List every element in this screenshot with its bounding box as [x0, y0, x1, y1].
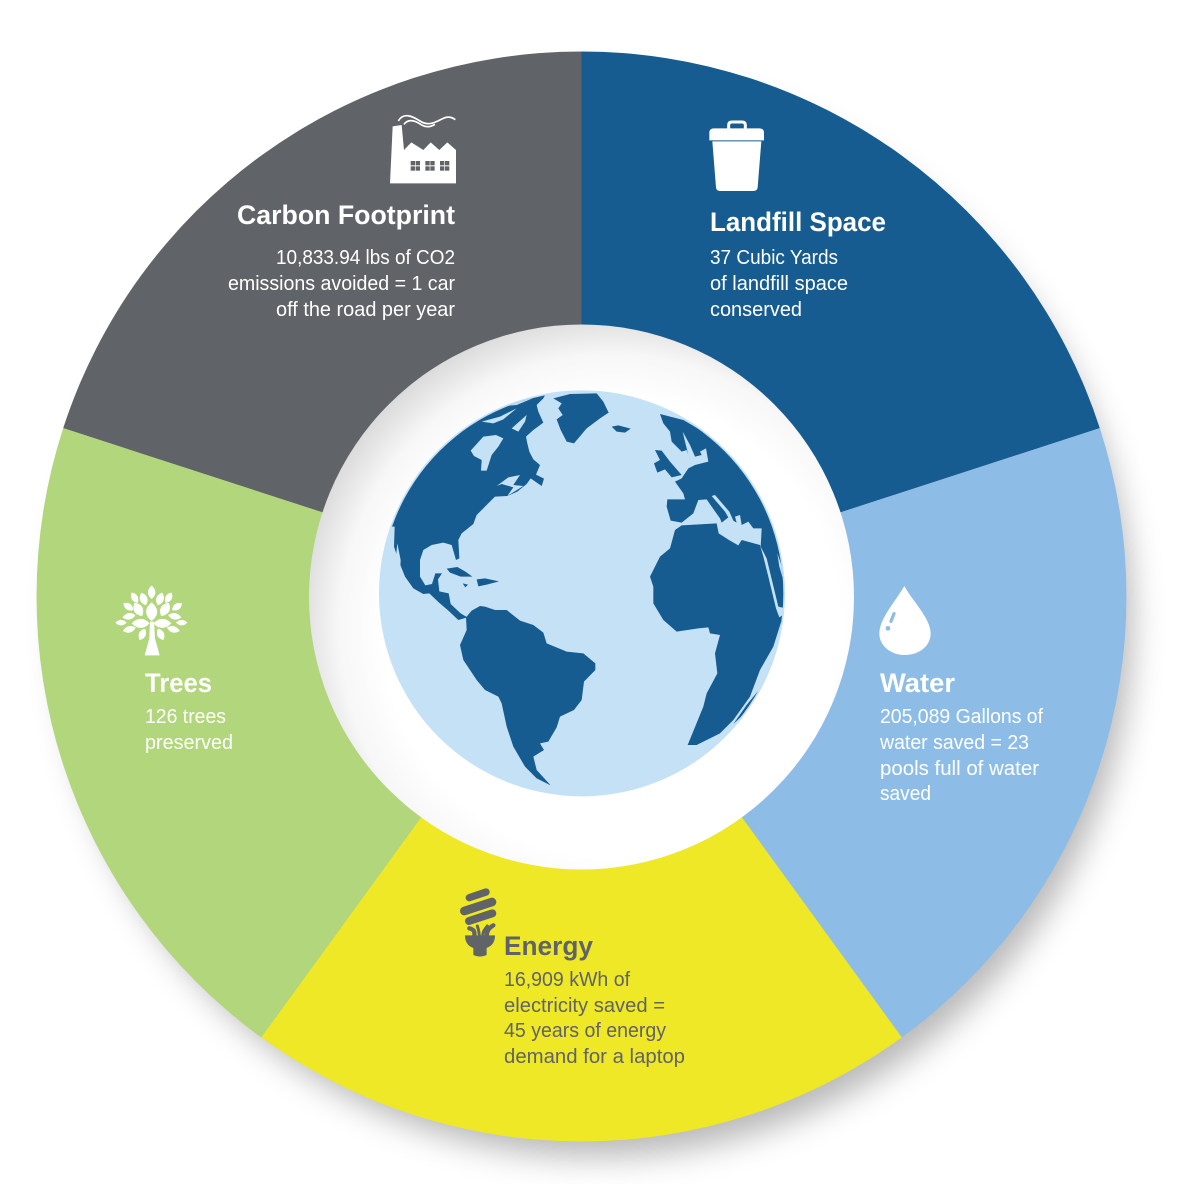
text: carbon details: off the road per year: [276, 299, 455, 321]
text: carbon details: emissions avoided = 1 car: [228, 273, 455, 295]
text: trees details: 126 trees: [145, 706, 226, 728]
segment: water: [582, 428, 1126, 1037]
segment: carbon: [63, 52, 581, 596]
text: trees details: preserved: [145, 732, 233, 754]
heading: energy: Energy: [504, 931, 593, 961]
icon: light bulb: [464, 892, 495, 957]
text: water details: pools full of water: [880, 758, 1039, 780]
panel: carbon footprint: [63, 52, 581, 596]
Africa: [650, 523, 790, 745]
icon: water drop: [879, 586, 931, 655]
text: water details: 205,089 Gallons of: [880, 706, 1043, 728]
heading: carbon footprint: Carbon Footprint: [237, 200, 455, 230]
Eurasia: [660, 414, 784, 608]
text: energy details: 45 years of energy: [504, 1020, 666, 1042]
globe land: [392, 393, 784, 786]
segment: landfill: [582, 52, 1100, 596]
text: landfill details: 37 Cubic Yards: [710, 247, 838, 269]
Cuba: [447, 567, 472, 577]
text: trees details: [145, 706, 233, 754]
Greenland: [553, 393, 609, 443]
text: energy details: 16,909 kWh of: [504, 969, 630, 991]
Jamaica: [463, 583, 468, 587]
segment: trees: [37, 428, 582, 1037]
heading: landfill space: Landfill Space: [710, 207, 886, 237]
icon: trash can: [709, 122, 764, 191]
globe: [370, 380, 807, 796]
text: carbon details: [228, 247, 455, 321]
heading: trees: Trees: [145, 668, 212, 698]
text: energy details: [504, 969, 685, 1068]
icon: tree: [115, 586, 187, 655]
text: energy details: electricity saved =: [504, 995, 665, 1017]
panel: energy: [261, 596, 902, 1141]
segment: energy: [261, 596, 902, 1141]
globe ocean: [379, 390, 785, 796]
text: energy details: demand for a laptop: [504, 1046, 685, 1068]
text: landfill details: conserved: [710, 299, 802, 321]
icon: factory: [390, 116, 456, 183]
Madagascar: [733, 691, 758, 724]
text: carbon details: 10,833.94 lbs of CO2: [276, 247, 455, 269]
text: landfill details: of landfill space: [710, 273, 848, 295]
Great Britain and Ireland: [654, 450, 682, 477]
text: water details: saved: [880, 783, 931, 805]
panel: landfill space: [582, 52, 1100, 596]
heading: water: Water: [880, 668, 955, 698]
text: water details: [879, 706, 1043, 805]
Hispaniola: [477, 578, 499, 586]
text: landfill details: [710, 247, 848, 321]
text: water details: water saved = 23: [879, 732, 1029, 754]
North America bays and channels: [396, 397, 537, 572]
center ring: [309, 324, 854, 870]
panel: water: [582, 428, 1126, 1037]
North America: [392, 396, 545, 620]
Iceland: [612, 425, 631, 433]
South America: [460, 606, 595, 785]
panel: trees: [37, 428, 582, 1037]
